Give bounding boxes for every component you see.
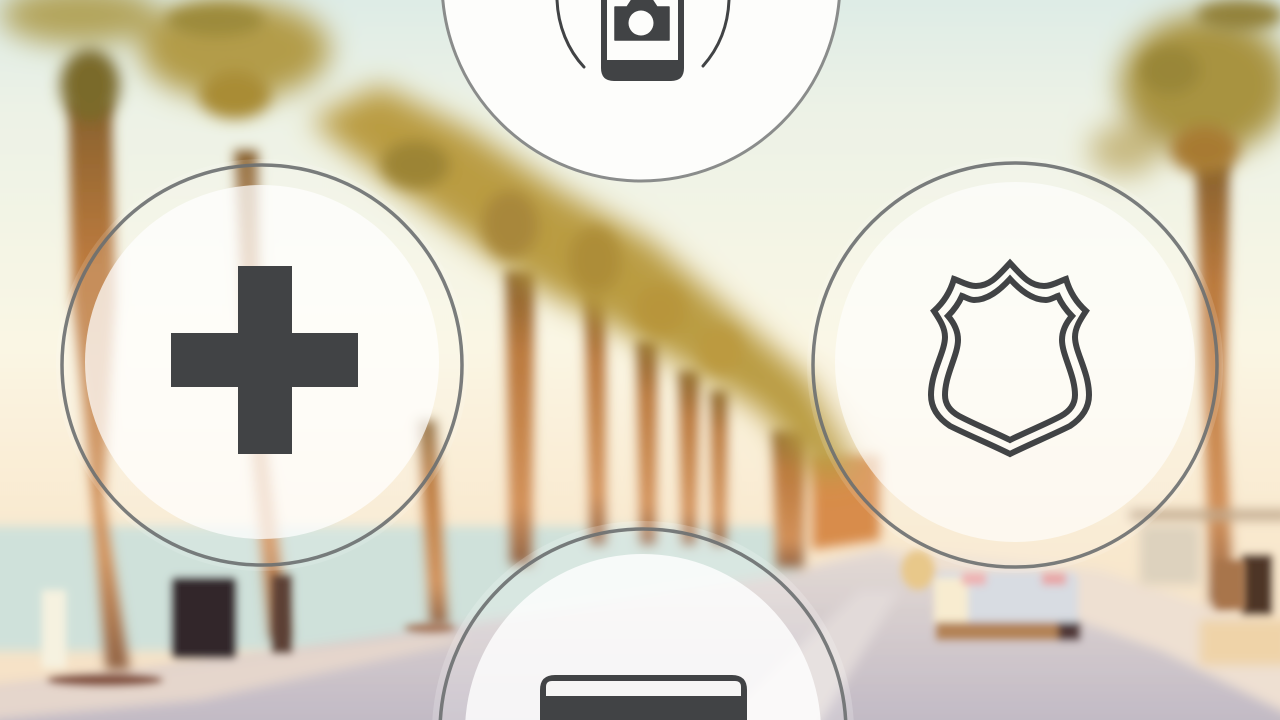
panel: bottom circle with credit card icon bbox=[432, 521, 854, 720]
panel: top circle with phone camera icon bbox=[442, 0, 840, 181]
background objects: bins, bollards, car bbox=[42, 510, 1280, 686]
icon: police shield bbox=[931, 263, 1089, 454]
panel: left circle with medical cross icon bbox=[56, 159, 468, 571]
icon: medical cross bbox=[171, 266, 358, 454]
icon: smartphone with camera bbox=[557, 0, 729, 81]
panel: right circle with police shield icon bbox=[807, 157, 1223, 573]
icon: credit card bbox=[540, 675, 747, 720]
